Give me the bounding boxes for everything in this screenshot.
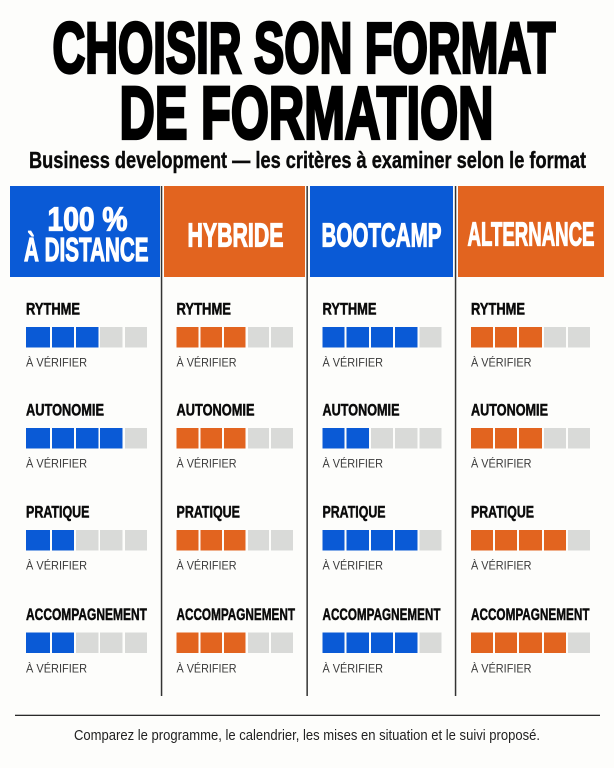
- header: bootcamp: BOOTCAMP: [322, 216, 442, 254]
- criterion: pratique: PRATIQUE: [471, 502, 534, 522]
- criterion: autonomie: AUTONOMIE: [176, 400, 254, 420]
- criterion: rythme: [26, 300, 147, 370]
- criterion: rythme: À VÉRIFIER: [26, 356, 87, 370]
- header: hybride: HYBRIDE: [188, 216, 284, 254]
- title: [52, 10, 556, 154]
- criterion: pratique: [471, 502, 590, 572]
- criterion: autonomie: [471, 400, 590, 470]
- criterion: rythme: [176, 300, 293, 370]
- criterion: rythme: RYTHME: [176, 300, 231, 318]
- criterion: accompagnement: [322, 605, 442, 676]
- criterion: autonomie: À VÉRIFIER: [322, 458, 383, 470]
- criterion: pratique: [176, 502, 293, 572]
- panel: alternance: [458, 186, 604, 676]
- criterion: accompagnement: À VÉRIFIER: [176, 662, 236, 676]
- criterion: accompagnement: À VÉRIFIER: [322, 662, 383, 676]
- criterion: accompagnement: À VÉRIFIER: [26, 662, 87, 676]
- header: 100 % à distance: [10, 186, 160, 277]
- criterion: pratique: [322, 502, 442, 572]
- criterion: rythme: À VÉRIFIER: [176, 356, 236, 370]
- criterion: rythme: RYTHME: [26, 300, 80, 318]
- criterion: autonomie: [322, 400, 442, 470]
- panel: hybride: [164, 186, 305, 676]
- criterion: accompagnement: À VÉRIFIER: [471, 662, 532, 676]
- criterion: accompagnement: [176, 605, 295, 676]
- header: hybride: [164, 186, 305, 277]
- criterion: pratique: À VÉRIFIER: [176, 560, 236, 572]
- criterion: rythme: À VÉRIFIER: [322, 356, 383, 370]
- criterion: autonomie: AUTONOMIE: [322, 400, 400, 420]
- header: bootcamp: [310, 186, 453, 277]
- criterion: accompagnement: [471, 605, 590, 676]
- criterion: accompagnement: ACCOMPAGNEMENT: [176, 605, 295, 624]
- criterion: rythme: RYTHME: [322, 300, 376, 318]
- criterion: autonomie: À VÉRIFIER: [471, 458, 532, 470]
- criterion: autonomie: À VÉRIFIER: [176, 458, 236, 470]
- panel: 100 % à distance: [10, 186, 160, 676]
- criterion: rythme: RYTHME: [471, 300, 525, 318]
- footer rule: [15, 715, 600, 716]
- criterion: pratique: [26, 502, 147, 572]
- criterion: pratique: À VÉRIFIER: [471, 560, 532, 572]
- criterion: autonomie: AUTONOMIE: [471, 400, 548, 420]
- header: alternance: [458, 186, 604, 277]
- criterion: rythme: À VÉRIFIER: [471, 356, 532, 370]
- criterion: rythme: [471, 300, 590, 370]
- panel: bootcamp: [310, 186, 453, 676]
- criterion: accompagnement: ACCOMPAGNEMENT: [322, 605, 441, 624]
- header: 100 % à distance: 100 %: [48, 200, 128, 238]
- criterion: accompagnement: ACCOMPAGNEMENT: [26, 605, 147, 624]
- criterion: pratique: PRATIQUE: [176, 502, 240, 522]
- criterion: autonomie: [176, 400, 293, 470]
- criterion: pratique: PRATIQUE: [26, 502, 90, 522]
- criterion: accompagnement: [26, 605, 147, 676]
- criterion: autonomie: AUTONOMIE: [26, 400, 104, 420]
- footer note: Comparez le programme, le calendrier, les mises en situation et le suivi proposé.: [74, 728, 540, 744]
- criterion: pratique: PRATIQUE: [322, 502, 386, 522]
- column separators: [161, 186, 456, 696]
- criterion: autonomie: À VÉRIFIER: [26, 458, 87, 470]
- criterion: pratique: À VÉRIFIER: [26, 560, 87, 572]
- criterion: rythme: [322, 300, 442, 370]
- criterion: autonomie: [26, 400, 147, 470]
- header: 100 % à distance: À DISTANCE: [24, 231, 148, 268]
- criterion: pratique: À VÉRIFIER: [322, 560, 383, 572]
